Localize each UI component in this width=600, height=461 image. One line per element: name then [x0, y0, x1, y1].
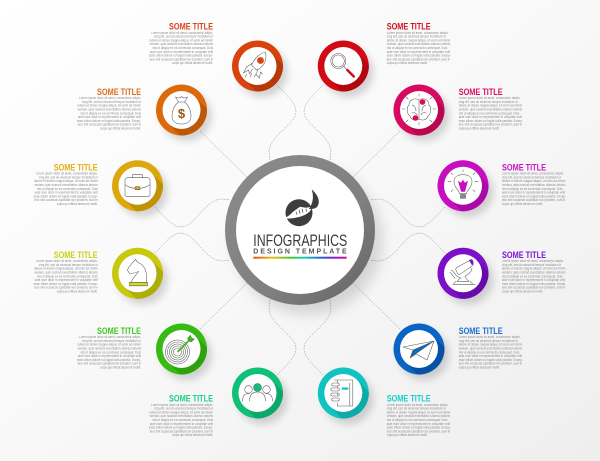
hub ring — [225, 155, 382, 314]
body text: nisi ut aliquip ex ea commodo consequat. Duis — [37, 274, 98, 278]
icon: target with arrow — [166, 335, 194, 364]
body text: culpa qui officia deserunt mollit. — [172, 433, 213, 437]
body text: esse cillum dolore eu fugiat nulla pariatur. Excep- — [502, 282, 566, 286]
panel: step 5 target — [77, 283, 247, 380]
body text: aute irure dolor in reprehenderit in voluptate velit — [35, 190, 98, 195]
body text: culpa qui officia deserunt mollit. — [502, 289, 543, 294]
body text: cing elit, sed do eiusmod tempor incididunt ut — [387, 406, 446, 411]
body text: Lorem ipsum dolor sit amet, consectetur adipis- — [387, 403, 449, 407]
icon: magnifier — [331, 54, 354, 76]
body text: cing elit, sed do eiusmod tempor incididunt ut — [459, 100, 518, 104]
connector: microscope to hub — [370, 233, 445, 261]
body text: esse cillum dolore eu fugiat nulla pariatur. Excep- — [387, 425, 451, 430]
marker: briefcase circle — [112, 160, 168, 217]
body text: teur sint occaecat cupidatat non proident, sunt in — [34, 285, 98, 290]
body text: nisi ut aliquip ex ea commodo consequat. Duis — [37, 187, 98, 191]
body text: cing elit, sed do eiusmod tempor incididunt ut — [387, 34, 446, 39]
body text: cing elit, sed do eiusmod tempor incididunt ut — [82, 339, 141, 343]
body text: Lorem ipsum dolor sit amet, consectetur adipis- — [79, 96, 141, 100]
body text: labore et dolore magna aliqua. Ut enim ad minim — [387, 38, 450, 42]
logo icon — [283, 189, 319, 226]
connector: brain to hub — [353, 131, 400, 177]
body text: aute irure dolor in reprehenderit in voluptate velit — [150, 50, 213, 54]
body text: culpa qui officia deserunt mollit. — [172, 61, 213, 65]
body text: esse cillum dolore eu fugiat nulla pariatur. Excep- — [149, 53, 213, 58]
body text: Lorem ipsum dolor sit amet, consectetur adipis- — [459, 96, 521, 100]
body text: labore et dolore magna aliqua. Ut enim ad minim — [502, 266, 566, 271]
panel: step 3 briefcase — [34, 160, 230, 227]
panel: step 8 brain — [353, 84, 523, 177]
connector: plane to hub — [353, 283, 400, 329]
body text: veniam, quis nostrud exercitation ullamco laboris — [34, 270, 98, 275]
panel: step 12 notebook — [304, 300, 451, 437]
title: SOME TITLE — [502, 250, 546, 260]
title: SOME TITLE — [97, 326, 141, 336]
icon: people — [242, 384, 272, 401]
icon: brain — [402, 94, 436, 125]
body text: nisi ut aliquip ex ea commodo consequat. Duis — [459, 111, 520, 115]
body text: aute irure dolor in reprehenderit in voluptate velit — [502, 278, 565, 282]
body text: cing elit, sed do eiusmod tempor incididunt ut — [82, 100, 141, 104]
marker: microscope circle — [438, 248, 493, 304]
body text: esse cillum dolore eu fugiat nulla pariatur. Excep- — [459, 358, 523, 362]
heading: infographics: INFOGRAPHICS — [253, 231, 347, 250]
body text: teur sint occaecat cupidatat non proident, sunt in — [387, 57, 450, 61]
body text: aute irure dolor in reprehenderit in voluptate velit — [387, 422, 450, 426]
connector: target to hub — [200, 283, 247, 329]
marker: notebook circle — [318, 368, 373, 424]
body text: teur sint occaecat cupidatat non proident, sunt in — [150, 57, 213, 61]
panel: step 10 microscope — [370, 233, 566, 304]
icon: light bulb — [448, 170, 478, 199]
body text: veniam, quis nostrud exercitation ullamco laboris — [150, 414, 213, 418]
marker: brain circle — [394, 84, 449, 141]
panel: central hub — [225, 155, 382, 314]
marker: magnifier circle — [318, 40, 373, 97]
body text: culpa qui officia deserunt mollit. — [459, 126, 500, 131]
body text: Lorem ipsum dolor sit amet, consectetur adipis- — [387, 31, 449, 35]
body text: veniam, quis nostrud exercitation ullamco laboris — [459, 107, 522, 112]
body text: esse cillum dolore eu fugiat nulla pariatur. Excep- — [459, 119, 523, 123]
body text: nisi ut aliquip ex ea commodo consequat. Duis — [80, 111, 141, 115]
body text: nisi ut aliquip ex ea commodo consequat. Duis — [459, 350, 520, 354]
title: SOME TITLE — [54, 250, 98, 260]
title: SOME TITLE — [459, 326, 503, 336]
body text: labore et dolore magna aliqua. Ut enim ad minim — [34, 266, 98, 271]
panel: step 7 magnifier — [304, 22, 451, 160]
title: SOME TITLE — [169, 22, 213, 32]
body text: veniam, quis nostrud exercitation ullamco laboris — [150, 42, 213, 46]
title: SOME TITLE — [459, 87, 503, 97]
body text: aute irure dolor in reprehenderit in voluptate velit — [150, 422, 213, 426]
marker: money circle — [156, 84, 212, 141]
body text: Lorem ipsum dolor sit amet, consectetur adipis- — [36, 259, 98, 263]
body text: labore et dolore magna aliqua. Ut enim ad minim — [150, 410, 213, 414]
body text: nisi ut aliquip ex ea commodo consequat. Duis — [80, 350, 141, 354]
body text: teur sint occaecat cupidatat non proident, sunt in — [150, 429, 213, 433]
icon: money bag — [172, 96, 191, 124]
body text: culpa qui officia deserunt mollit. — [387, 61, 428, 65]
body text: culpa qui officia deserunt mollit. — [459, 365, 500, 370]
body text: Lorem ipsum dolor sit amet, consectetur adipis- — [79, 335, 141, 339]
icon: chess knight — [128, 259, 148, 286]
connector: knight to hub — [155, 233, 230, 261]
panel: step 11 paper plane — [353, 283, 523, 380]
connector: rocket to hub — [269, 85, 296, 160]
icon: rocket — [244, 52, 266, 78]
body text: aute irure dolor in reprehenderit in voluptate velit — [459, 115, 522, 119]
body text: aute irure dolor in reprehenderit in voluptate velit — [78, 354, 141, 358]
body text: teur sint occaecat cupidatat non proident, sunt in — [459, 361, 522, 366]
marker: plane circle — [394, 324, 449, 380]
body text: veniam, quis nostrud exercitation ullamco laboris — [387, 414, 450, 418]
body text: esse cillum dolore eu fugiat nulla pariatur. Excep- — [77, 119, 141, 123]
body text: labore et dolore magna aliqua. Ut enim ad minim — [78, 103, 141, 108]
body text: teur sint occaecat cupidatat non proident, sunt in — [459, 122, 522, 127]
body text: esse cillum dolore eu fugiat nulla pariatur. Excep- — [77, 358, 141, 362]
body text: cing elit, sed do eiusmod tempor incididunt ut — [39, 263, 98, 267]
body text: esse cillum dolore eu fugiat nulla pariatur. Excep- — [34, 282, 98, 286]
panel: step 9 light bulb — [370, 160, 566, 227]
body text: teur sint occaecat cupidatat non proident, sunt in — [387, 429, 450, 433]
body text: Lorem ipsum dolor sit amet, consectetur adipis- — [36, 171, 98, 176]
title: SOME TITLE — [502, 162, 546, 172]
body text: veniam, quis nostrud exercitation ullamco laboris — [78, 107, 141, 112]
body text: veniam, quis nostrud exercitation ullamco laboris — [459, 346, 522, 351]
subheading: design template: DESIGN TEMPLATE — [253, 249, 347, 256]
body text: veniam, quis nostrud exercitation ullamco laboris — [502, 183, 566, 187]
title: SOME TITLE — [387, 22, 431, 32]
body text: labore et dolore magna aliqua. Ut enim ad minim — [387, 410, 450, 414]
marker: knight circle — [112, 248, 168, 304]
body text: veniam, quis nostrud exercitation ullamco laboris — [78, 346, 141, 351]
title: SOME TITLE — [97, 87, 141, 97]
body text: nisi ut aliquip ex ea commodo consequat. Duis — [152, 46, 213, 50]
body text: cing elit, sed do eiusmod tempor incididunt ut — [154, 34, 213, 39]
marker: bulb circle — [438, 160, 493, 217]
body text: Lorem ipsum dolor sit amet, consectetur adipis- — [151, 403, 213, 407]
body text: cing elit, sed do eiusmod tempor incididunt ut — [39, 175, 98, 179]
connector: people to hub — [269, 300, 296, 375]
icon: microscope — [450, 259, 475, 284]
body text: teur sint occaecat cupidatat non proident, sunt in — [78, 122, 141, 127]
rainbow bar — [253, 257, 347, 259]
body text: culpa qui officia deserunt mollit. — [57, 289, 98, 294]
panel: step 1 rocket — [149, 22, 296, 160]
body text: aute irure dolor in reprehenderit in voluptate velit — [459, 354, 522, 358]
body text: nisi ut aliquip ex ea commodo consequat. Duis — [387, 418, 448, 422]
body text: esse cillum dolore eu fugiat nulla pariatur. Excep- — [149, 425, 213, 430]
body text: nisi ut aliquip ex ea commodo consequat. Duis — [502, 274, 563, 278]
icon: paper plane — [403, 341, 434, 360]
connector: magnifier to hub — [304, 85, 331, 160]
body text: veniam, quis nostrud exercitation ullamco laboris — [34, 183, 98, 187]
marker: people circle — [232, 368, 288, 424]
connector: bulb to hub — [370, 199, 445, 227]
body text: culpa qui officia deserunt mollit. — [502, 202, 543, 206]
icon: money bag: $ — [178, 106, 186, 121]
body text: esse cillum dolore eu fugiat nulla pariatur. Excep- — [502, 194, 566, 198]
body text: Lorem ipsum dolor sit amet, consectetur adipis- — [459, 335, 521, 339]
body text: aute irure dolor in reprehenderit in voluptate velit — [35, 278, 98, 282]
marker: rocket circle — [232, 40, 288, 97]
body text: culpa qui officia deserunt mollit. — [100, 126, 141, 131]
body text: labore et dolore magna aliqua. Ut enim ad minim — [459, 342, 522, 347]
body text: Lorem ipsum dolor sit amet, consectetur adipis- — [151, 31, 213, 35]
body text: esse cillum dolore eu fugiat nulla pariatur. Excep- — [34, 194, 98, 198]
body text: Lorem ipsum dolor sit amet, consectetur adipis- — [502, 171, 564, 176]
body text: veniam, quis nostrud exercitation ullamco laboris — [502, 270, 566, 275]
body text: aute irure dolor in reprehenderit in voluptate velit — [387, 50, 450, 54]
body text: labore et dolore magna aliqua. Ut enim ad minim — [78, 342, 141, 347]
connector: money to hub — [200, 131, 247, 177]
marker: target circle — [156, 324, 212, 380]
body text: culpa qui officia deserunt mollit. — [387, 433, 428, 437]
body text: cing elit, sed do eiusmod tempor incididunt ut — [459, 339, 518, 343]
body text: Lorem ipsum dolor sit amet, consectetur adipis- — [502, 259, 564, 263]
connector: notebook to hub — [304, 300, 331, 375]
body text: aute irure dolor in reprehenderit in voluptate velit — [502, 190, 565, 195]
body text: teur sint occaecat cupidatat non proident, sunt in — [34, 198, 98, 202]
body text: labore et dolore magna aliqua. Ut enim ad minim — [502, 179, 566, 183]
body text: labore et dolore magna aliqua. Ut enim ad minim — [34, 179, 98, 183]
panel: step 4 chess knight — [34, 233, 230, 304]
connector: briefcase to hub — [155, 199, 230, 227]
body text: cing elit, sed do eiusmod tempor incididunt ut — [502, 263, 561, 267]
body text: labore et dolore magna aliqua. Ut enim ad minim — [459, 103, 522, 108]
body text: esse cillum dolore eu fugiat nulla pariatur. Excep- — [387, 53, 451, 58]
body text: aute irure dolor in reprehenderit in voluptate velit — [78, 115, 141, 119]
panel: step 2 money bag — [77, 84, 247, 177]
icon: briefcase — [125, 175, 150, 197]
icon: notebook — [331, 380, 353, 406]
panel: step 6 people — [149, 300, 296, 437]
body text: labore et dolore magna aliqua. Ut enim ad minim — [150, 38, 213, 42]
body text: culpa qui officia deserunt mollit. — [100, 365, 141, 370]
body text: veniam, quis nostrud exercitation ullamco laboris — [387, 42, 450, 46]
body text: cing elit, sed do eiusmod tempor incididunt ut — [502, 175, 561, 179]
body text: nisi ut aliquip ex ea commodo consequat. Duis — [152, 418, 213, 422]
title: SOME TITLE — [387, 394, 431, 404]
body text: teur sint occaecat cupidatat non proident, sunt in — [502, 285, 565, 290]
body text: cing elit, sed do eiusmod tempor incididunt ut — [154, 406, 213, 411]
body text: nisi ut aliquip ex ea commodo consequat. Duis — [387, 46, 448, 50]
body text: teur sint occaecat cupidatat non proident, sunt in — [502, 198, 565, 202]
body text: culpa qui officia deserunt mollit. — [57, 202, 98, 206]
title: SOME TITLE — [169, 394, 213, 404]
body text: teur sint occaecat cupidatat non proident, sunt in — [78, 361, 141, 366]
title: SOME TITLE — [54, 162, 98, 172]
body text: nisi ut aliquip ex ea commodo consequat. Duis — [502, 187, 563, 191]
